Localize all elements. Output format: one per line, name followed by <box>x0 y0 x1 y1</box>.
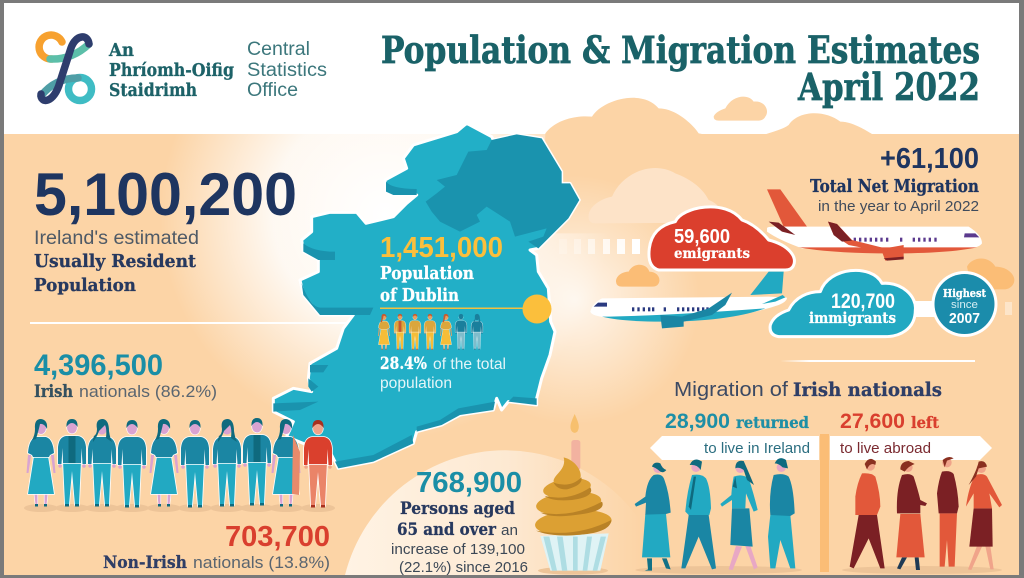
Dublin dot <box>522 294 552 324</box>
Irish nationals stat: nationals (86.2%) <box>79 382 217 401</box>
total population block: 5,100,200 <box>34 161 297 228</box>
non-Irish nationals stat: 703,700 <box>225 521 330 553</box>
Dublin callout: of Dublin <box>380 285 459 306</box>
figure: red man 3 <box>937 457 959 567</box>
migration of Irish nationals heading <box>674 379 942 401</box>
sign: to live in Ireland: to live in Ireland <box>704 440 810 457</box>
highest since 2007 badge: 2007 <box>949 310 980 327</box>
Dublin callout: population <box>380 375 452 392</box>
left stat: 27,600 <box>840 410 905 433</box>
teal figures <box>26 418 300 508</box>
background clouds <box>544 97 1020 233</box>
Dublin callout: 28.4% <box>380 354 427 374</box>
Dublin callout <box>378 232 552 392</box>
highest since 2007 badge <box>932 271 998 337</box>
row of ten people <box>24 418 335 512</box>
connector to highest badge <box>913 301 937 317</box>
figure: teal man 2 <box>681 459 716 569</box>
wrapper <box>540 533 609 571</box>
total population block <box>34 161 297 296</box>
returned stat: returned <box>736 413 809 432</box>
older persons stat: increase of 139,100 <box>391 541 525 558</box>
Irish nationals stat: Irish <box>34 382 73 402</box>
returned stat <box>665 410 809 433</box>
left stat <box>840 410 940 433</box>
figure: red woman 2 <box>896 461 927 570</box>
figure: teal woman 3 <box>720 461 758 570</box>
older persons stat: 768,900 <box>416 467 522 499</box>
English name: Office <box>247 80 298 101</box>
icon: red departing plane <box>767 189 982 261</box>
total population block: Usually Resident <box>34 251 197 272</box>
non-Irish nationals stat <box>103 521 330 573</box>
title <box>381 28 980 109</box>
figure: red woman 4 <box>966 461 1002 570</box>
highest since 2007 badge: Highest <box>943 286 987 300</box>
sign: to live abroad: to live abroad <box>840 440 931 457</box>
returning people figures <box>635 458 802 574</box>
Dublin callout: Population <box>380 263 474 284</box>
sari accent <box>292 435 300 495</box>
icon: teal arriving plane <box>590 272 787 328</box>
non-Irish nationals stat: nationals (13.8%) <box>193 553 330 572</box>
teal immigrants cloud <box>770 270 915 337</box>
teal immigrants cloud: 120,700 <box>831 290 895 313</box>
icon: birthday cupcake <box>534 414 612 575</box>
older persons stat: 65 and over <box>397 520 497 540</box>
map of Ireland <box>273 123 579 468</box>
net migration heading: +61,100 <box>880 143 979 175</box>
flight path dashes <box>559 239 1012 315</box>
figure: teal man 4 <box>768 458 795 568</box>
Dublin callout: of the total <box>433 356 506 373</box>
highest since 2007 badge: since <box>951 299 978 311</box>
Irish nationals stat <box>34 349 217 402</box>
title: April 2022 <box>797 65 980 109</box>
older persons stat <box>391 467 528 576</box>
non-Irish nationals stat: Non-Irish <box>103 553 187 573</box>
older persons stat: Persons aged <box>400 499 515 519</box>
sign: to live abroad <box>830 436 992 460</box>
migration of Irish nationals heading: Irish nationals <box>793 379 942 401</box>
English name: Statistics <box>247 60 327 81</box>
figure: teal woman 1 <box>635 463 671 571</box>
net migration heading: Total Net Migration <box>810 176 979 197</box>
older persons stat: an <box>501 522 518 539</box>
red emigrants cloud <box>649 207 794 270</box>
Dublin callout: 1,451,000 <box>380 232 503 264</box>
small population pictogram <box>378 314 483 350</box>
net migration heading: in the year to April 2022 <box>818 198 979 215</box>
coastal shading <box>273 182 537 468</box>
candle <box>571 440 580 470</box>
pale and orange clouds <box>589 168 1014 289</box>
Irish name: Phríomh-Oifig <box>109 61 234 81</box>
Irish nationals stat: 4,396,500 <box>34 349 163 382</box>
older persons stat: (22.1%) since 2016 <box>399 559 528 576</box>
logo mark <box>39 35 92 100</box>
red emigrants cloud: 59,600 <box>674 226 730 248</box>
ground shadows <box>24 504 335 512</box>
signpost <box>650 434 992 572</box>
peach background panel <box>4 134 1020 575</box>
background glows <box>345 175 700 575</box>
returned stat: 28,900 <box>665 410 730 433</box>
left stat: left <box>911 413 940 432</box>
English name: Central <box>247 39 310 60</box>
total population block: Ireland's estimated <box>34 228 199 249</box>
northern ireland region <box>426 134 579 248</box>
Irish name <box>108 41 234 101</box>
figure: red man 1 <box>850 459 885 568</box>
frosting <box>534 457 612 538</box>
teal immigrants cloud: immigrants <box>809 309 896 327</box>
logo: Central Statistics Office <box>39 35 327 101</box>
red figure <box>304 420 332 508</box>
sign: to live in Ireland <box>650 436 819 460</box>
republic landmass <box>273 123 579 468</box>
migration of Irish nationals heading: Migration of <box>674 379 788 401</box>
leaving people figures <box>842 457 1002 574</box>
Irish name: An <box>108 41 134 61</box>
net migration heading <box>810 143 979 215</box>
English name <box>247 39 327 101</box>
red emigrants cloud: emigrants <box>674 246 750 262</box>
Irish name: Staidrimh <box>109 81 197 101</box>
total population block: Population <box>34 275 136 296</box>
